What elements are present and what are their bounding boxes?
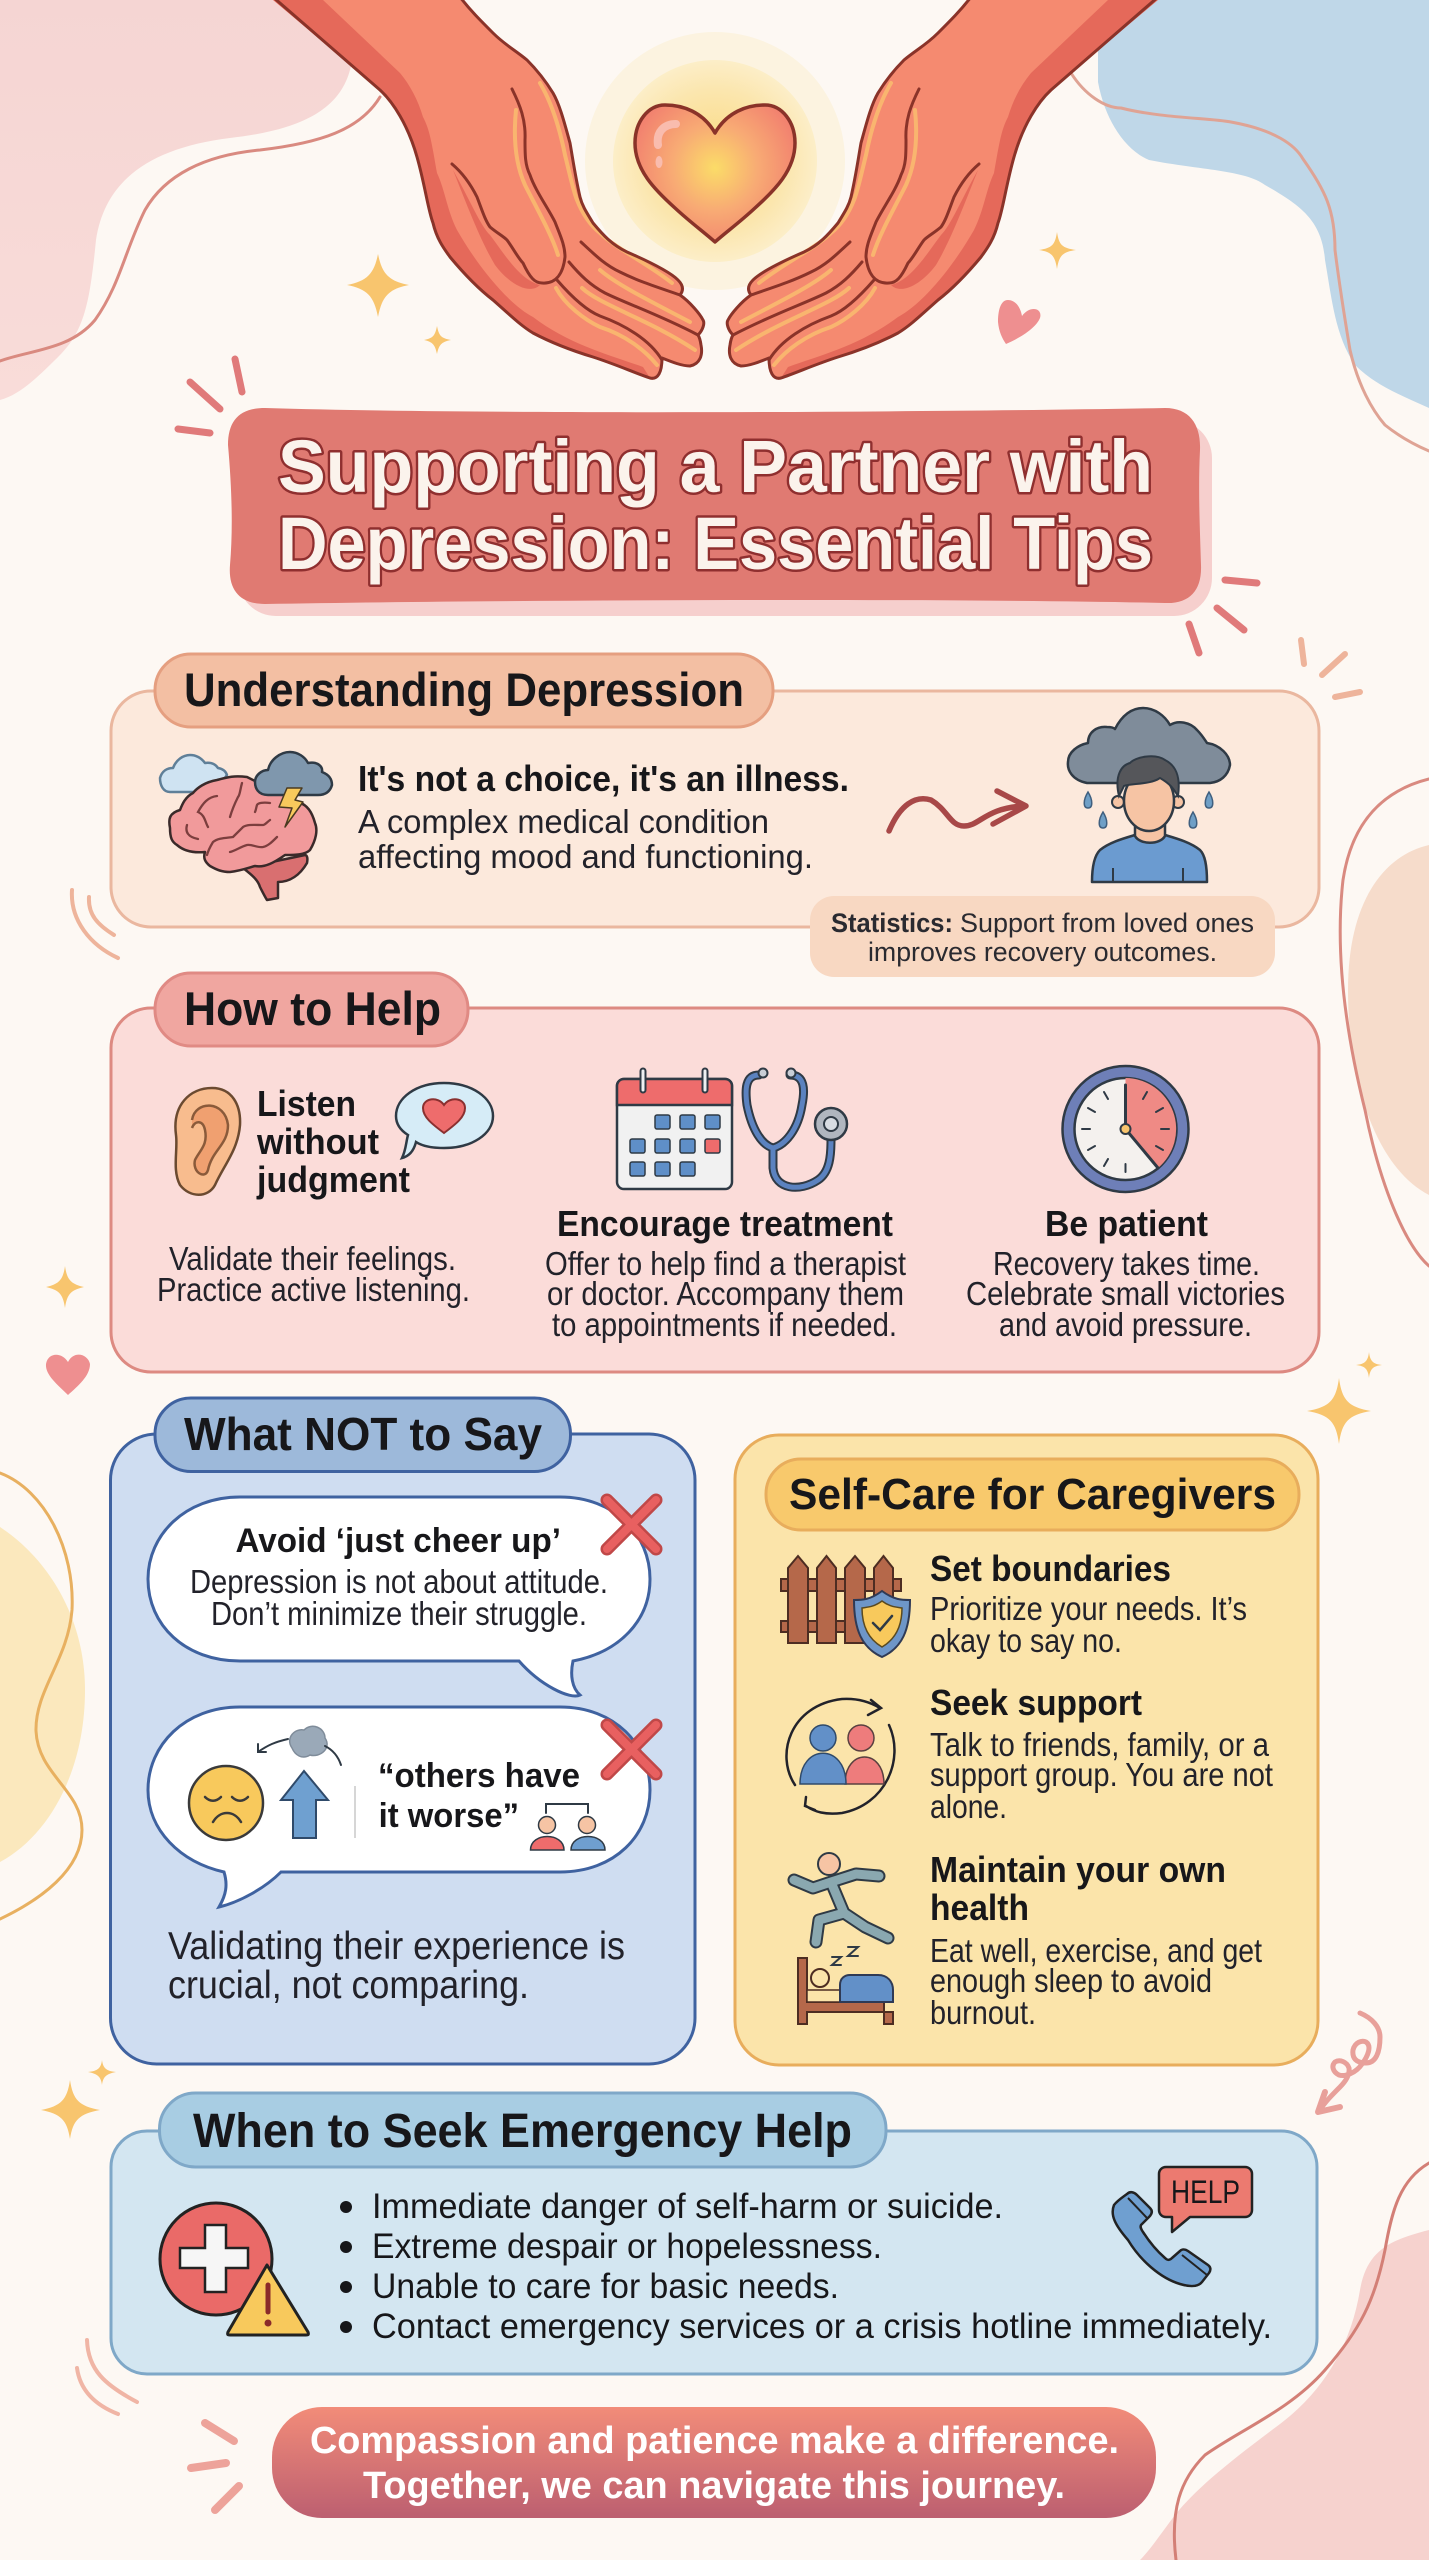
title text: Depression: Essential Tips xyxy=(278,502,1153,585)
panel: What NOT to Say xyxy=(110,1398,695,2064)
icon: stethoscope xyxy=(746,1068,847,1187)
heading: Self-Care for Caregivers: Self-Care for Caregivers xyxy=(789,1470,1276,1519)
text: Eat well, exercise, and get xyxy=(930,1932,1262,1969)
heading: When to Seek Emergency Help: When to Seek Emergency Help xyxy=(193,2105,852,2158)
title text xyxy=(278,425,1153,585)
speech bubble: avoid just cheer up: Depression is not about attitude. xyxy=(190,1563,608,1600)
heading: Self-Care for Caregivers xyxy=(766,1459,1299,1530)
list: warning signs: Immediate danger of self-harm or suicide. xyxy=(372,2187,1003,2226)
panel background xyxy=(110,1434,695,2064)
panel background xyxy=(735,1435,1318,2065)
title text: Supporting a Partner with xyxy=(278,425,1153,508)
quote text: “others have xyxy=(378,1757,580,1795)
text: be patient xyxy=(966,1203,1285,1343)
item: maintain your own health xyxy=(794,1849,1262,2031)
list: warning signs: Unable to care for basic needs. xyxy=(372,2267,839,2306)
panel background xyxy=(111,691,1319,927)
heading: Understanding Depression: Understanding Depression xyxy=(184,663,744,716)
illustration: hands holding a glowing heart xyxy=(273,0,1158,378)
icon: sad face xyxy=(189,1766,263,1840)
list: warning signs xyxy=(340,2187,1272,2346)
tip: be patient xyxy=(966,1066,1285,1343)
item: seek support xyxy=(786,1682,1273,1825)
text: health xyxy=(930,1887,1029,1928)
decorative left sparkle and heart xyxy=(46,1266,90,1395)
decorative bottom-left sparkles xyxy=(41,2060,116,2139)
icon: brain with clouds xyxy=(160,752,332,900)
heading text: Listen xyxy=(257,1083,356,1124)
text: Prioritize your needs. It’s xyxy=(930,1590,1247,1627)
icon: two people with bracket xyxy=(530,1804,605,1850)
heading: How to Help xyxy=(155,973,468,1046)
icon: phone with help bubble: HELP xyxy=(1171,2174,1240,2210)
callout: statistics: Statistics: xyxy=(831,908,953,938)
left hand xyxy=(273,0,704,378)
icon: medical cross and warning xyxy=(160,2203,308,2335)
footer rays xyxy=(191,2423,239,2510)
text: encourage treatment xyxy=(545,1203,906,1343)
icon: clock xyxy=(1062,1066,1188,1192)
panel: Understanding Depression xyxy=(111,654,1319,977)
text: be patient: Recovery takes time. xyxy=(993,1245,1260,1282)
icon: small cloud with arrows xyxy=(258,1726,341,1765)
text xyxy=(930,1548,1247,1659)
icon: red cross mark 2 xyxy=(607,1725,656,1774)
text: not a choice: A complex medical condition xyxy=(358,803,769,840)
icon: red cross mark 1 xyxy=(607,1500,656,1549)
quote text xyxy=(378,1757,580,1835)
icon: people in a cycle xyxy=(786,1699,894,1814)
text: encourage treatment: to appointments if needed. xyxy=(552,1306,897,1343)
closing text: crucial, not comparing. xyxy=(168,1964,529,2007)
text: support group. You are not xyxy=(930,1756,1273,1793)
title rays xyxy=(178,359,1257,653)
heading text: judgment xyxy=(256,1159,410,1200)
heading text: without xyxy=(256,1121,379,1162)
heading: What NOT to Say xyxy=(155,1398,570,1472)
callout: statistics: Support from loved ones xyxy=(960,908,1254,938)
text: encourage treatment: or doctor. Accompany them xyxy=(547,1275,904,1312)
title banner xyxy=(228,408,1212,616)
decorative spiral arrow xyxy=(1318,2013,1380,2112)
body text: Validate their feelings. xyxy=(169,1240,456,1277)
tip: listen without judgment xyxy=(157,1083,493,1308)
right hand xyxy=(727,0,1158,378)
decorative peach rays and arcs xyxy=(72,640,1360,958)
heading: How to Help: How to Help xyxy=(184,982,441,1035)
panel: Self-Care for Caregivers xyxy=(735,1435,1318,2065)
text: okay to say no. xyxy=(930,1622,1122,1659)
text: encourage treatment: Offer to help find a therapist xyxy=(545,1245,906,1282)
text: enough sleep to avoid xyxy=(930,1962,1212,1999)
text: Talk to friends, family, or a xyxy=(930,1726,1270,1763)
decorative bottom-left arcs xyxy=(77,2340,137,2414)
text: encourage treatment: Encourage treatment xyxy=(557,1203,893,1244)
speech bubble: avoid just cheer up: Avoid ‘just cheer up’ xyxy=(236,1522,561,1560)
heading: When to Seek Emergency Help xyxy=(160,2093,886,2167)
text: burnout. xyxy=(930,1994,1036,2031)
text: be patient: Be patient xyxy=(1045,1203,1208,1244)
icon: calendar xyxy=(617,1071,732,1189)
heading: What NOT to Say: What NOT to Say xyxy=(184,1408,542,1460)
tip: encourage treatment xyxy=(545,1068,906,1343)
banner shadow xyxy=(238,420,1212,616)
divider xyxy=(354,1786,356,1838)
panel: How to Help xyxy=(111,973,1319,1372)
icon: ear xyxy=(175,1088,240,1195)
banner shape xyxy=(228,408,1201,604)
icon: phone with help bubble xyxy=(1113,2167,1252,2286)
text: not a choice: It's not a choice, it's an illness. xyxy=(358,758,849,799)
heart xyxy=(635,105,795,242)
text xyxy=(930,1682,1273,1825)
quote text: it worse” xyxy=(379,1797,519,1835)
decorative sparkles and heart near hands xyxy=(347,232,1076,354)
heading text xyxy=(256,1083,410,1200)
text: not a choice: affecting mood and functioning. xyxy=(358,838,813,875)
icon: running person and bed xyxy=(794,1853,893,2024)
closing text xyxy=(168,1925,625,2007)
panel background xyxy=(111,1008,1319,1372)
icon: person under rain cloud xyxy=(1068,708,1230,882)
decorative right sparkles xyxy=(1307,1352,1382,1444)
glow behind heart xyxy=(585,32,845,290)
panel background xyxy=(111,2131,1317,2374)
speech bubble: avoid just cheer up xyxy=(148,1497,650,1696)
icon: fence and shield xyxy=(781,1556,910,1657)
text xyxy=(930,1849,1262,2031)
speech bubble: others have it worse xyxy=(148,1707,650,1907)
closing text: Validating their experience is xyxy=(168,1925,625,1968)
item: set boundaries xyxy=(781,1548,1247,1659)
footer banner xyxy=(272,2407,1156,2518)
text: be patient: Celebrate small victories xyxy=(966,1275,1285,1312)
icon: up arrow xyxy=(281,1771,328,1838)
body text: Practice active listening. xyxy=(157,1271,470,1308)
text: Maintain your own xyxy=(930,1849,1226,1890)
callout: statistics: improves recovery outcomes. xyxy=(868,937,1217,967)
text: Set boundaries xyxy=(930,1548,1171,1589)
panel: When to Seek Emergency Help xyxy=(111,2093,1317,2374)
text: Seek support xyxy=(930,1682,1142,1723)
text: be patient: and avoid pressure. xyxy=(999,1306,1252,1343)
list: warning signs: Extreme despair or hopelessness. xyxy=(372,2227,882,2266)
callout: statistics xyxy=(810,896,1275,977)
speech bubble: avoid just cheer up: Don’t minimize their struggle. xyxy=(211,1595,587,1632)
heading: Understanding Depression xyxy=(155,654,773,727)
footer banner: Compassion and patience make a difference. xyxy=(310,2420,1119,2462)
footer banner: Together, we can navigate this journey. xyxy=(363,2465,1065,2507)
list: warning signs: Contact emergency services or a crisis hotline immediately. xyxy=(372,2307,1272,2346)
text: alone. xyxy=(930,1788,1007,1825)
text: not a choice xyxy=(358,758,849,875)
body text xyxy=(157,1240,470,1308)
arrow: wavy xyxy=(889,791,1026,831)
icon: speech bubble heart xyxy=(396,1083,493,1158)
